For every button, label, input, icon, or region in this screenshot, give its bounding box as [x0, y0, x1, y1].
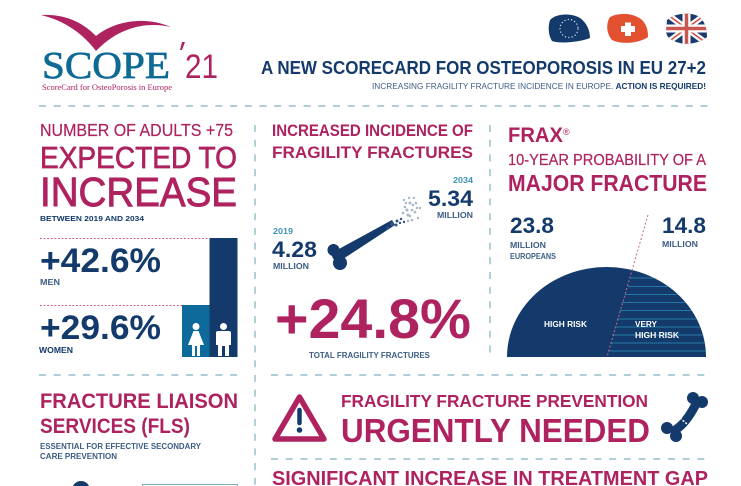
- panel: fragility fractures: [272, 122, 474, 360]
- callout: prevention: [275, 391, 708, 449]
- stat: women: +29.6%: [40, 309, 161, 347]
- panel: FLS: [40, 390, 238, 486]
- panel: FRAX: EUROPEANS: [510, 252, 557, 261]
- icon: person head: [72, 481, 90, 486]
- registered mark: ®: [563, 127, 570, 137]
- heading: FRAX: FRAX: [508, 124, 563, 147]
- title: A NEW SCORECARD FOR OSTEOPOROSIS IN EU 27+2: [261, 58, 706, 78]
- year 2034: 2034: [453, 176, 474, 185]
- heading line two: SERVICES (FLS): [40, 415, 190, 438]
- value 5.34: 5.34: [428, 186, 474, 211]
- million label: MILLION: [662, 240, 698, 249]
- label: men: MEN: [40, 278, 60, 287]
- logo: ScoreCard for OsteoPorosis in Europe: [42, 83, 172, 92]
- million label: MILLION: [273, 262, 309, 271]
- heading: INCREASED INCIDENCE OF: [272, 122, 473, 140]
- logo: SCOPE: [42, 45, 170, 87]
- heading: FRACTURE LIAISON: [40, 390, 238, 413]
- bar: men: [210, 238, 238, 357]
- heading line two: FRAGILITY FRACTURES: [272, 144, 473, 162]
- logo: 21: [185, 48, 218, 86]
- panel: adults over 75: [39, 120, 238, 357]
- heading: expected to: EXPECTED TO: [40, 140, 237, 175]
- subheading: 10-YEAR PROBABILITY OF A: [508, 152, 706, 169]
- label: high risk: HIGH RISK: [544, 320, 587, 329]
- icon: warning triangle: [275, 397, 324, 439]
- text: prevention: FRAGILITY FRACTURE PREVENTION: [341, 391, 648, 411]
- value 14.8: 14.8: [662, 213, 706, 238]
- flag: UK: [666, 14, 707, 44]
- heading: increase: INCREASE: [40, 169, 237, 215]
- label: women: WOMEN: [39, 346, 73, 355]
- million europeans: MILLION: [510, 241, 546, 250]
- value 4.28: 4.28: [272, 237, 317, 262]
- icon: woman: [188, 323, 204, 356]
- chart: risk semicircle: [507, 215, 720, 357]
- heading: major fracture: MAJOR FRACTURE: [508, 170, 707, 196]
- chart: risk semicircle: HIGH RISK: [635, 331, 679, 340]
- heading: number of adults: NUMBER OF ADULTS +75: [40, 120, 233, 140]
- million label: MILLION: [437, 211, 473, 220]
- logo: [41, 15, 218, 92]
- stat: men: +42.6%: [40, 242, 161, 280]
- box: [142, 484, 238, 486]
- period note: BETWEEN 2019 AND 2034: [40, 214, 145, 223]
- label: total: TOTAL FRAGILITY FRACTURES: [309, 351, 431, 360]
- subtitle: INCREASING FRAGILITY FRACTURE INCIDENCE IN EUROPE. ACTION IS REQUIRED!: [372, 81, 706, 91]
- text: urgently needed: URGENTLY NEEDED: [341, 412, 650, 449]
- icon: broken bone: [661, 392, 708, 442]
- bar: women: [182, 305, 210, 357]
- panel: FLS: CARE PREVENTION: [40, 452, 117, 461]
- icon: dissolving bone: [328, 197, 421, 270]
- flag: Switzerland: [607, 14, 648, 43]
- stat: total: +24.8%: [275, 287, 471, 350]
- panel: FRAX: [507, 124, 720, 357]
- value 23.8: 23.8: [510, 213, 554, 238]
- icon: man: [216, 323, 231, 356]
- year 2019: 2019: [273, 227, 294, 236]
- description: ESSENTIAL FOR EFFECTIVE SECONDARY: [40, 442, 202, 451]
- label: very high risk: VERY: [635, 320, 658, 329]
- flag: EU: [549, 14, 590, 42]
